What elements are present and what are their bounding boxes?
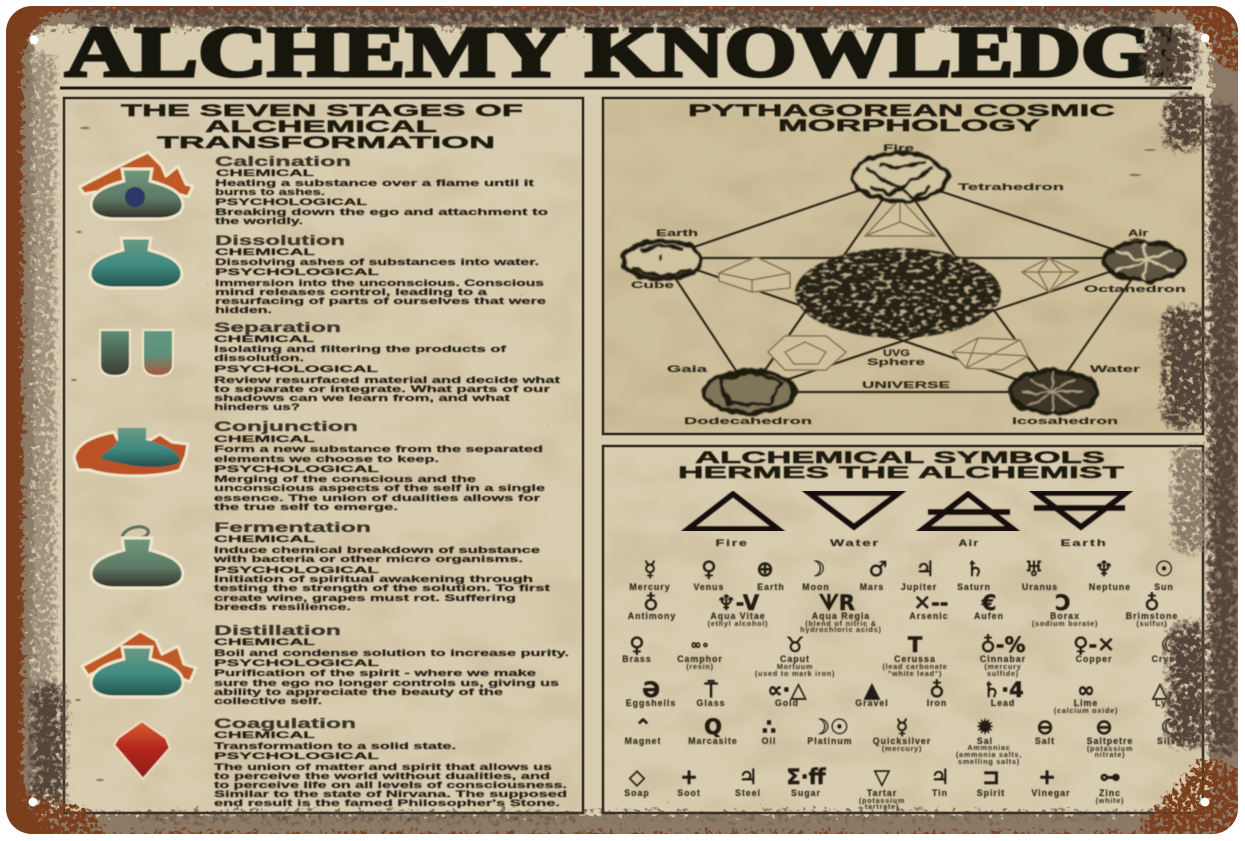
symbol row 5: ✹: [976, 715, 994, 739]
diagram labels: Water: [1090, 364, 1141, 375]
text: fermentation: testing the strength of the solution. To first: [214, 583, 551, 594]
symbol row 4: △: [1152, 678, 1169, 702]
chart: five element pentagram diagram: [623, 143, 1186, 427]
text: dissolution: Dissolving ashes of substances into water.: [215, 257, 539, 268]
symbol row 6: Zinc: [1099, 788, 1121, 798]
text: distillation: [214, 623, 569, 707]
symbol row 5: ☿: [896, 715, 908, 739]
symbol row 4: Gold: [775, 698, 799, 708]
symbol row 5: Ammoniac: [967, 743, 1011, 752]
symbol row 2: (sulfur): [1136, 619, 1168, 628]
text: conjunction: Form a new substance from the separated: [214, 444, 543, 455]
symbol row 6: +: [680, 765, 698, 789]
text: fermentation: Initiation of spiritual awakening through: [214, 574, 533, 585]
text: distillation: PSYCHOLOGICAL: [214, 658, 379, 669]
symbol row 6: Steel: [735, 788, 761, 798]
symbol row 5: Sal: [977, 736, 993, 746]
symbol row 1: planets: ☽: [807, 557, 825, 581]
symbol row 5: ☽☉: [811, 715, 849, 739]
symbol row 2: ♆-V: [717, 591, 760, 615]
symbol row 3: Crystal: [1152, 654, 1188, 664]
text: conjunction: essence. The union of dualities allows for: [214, 493, 541, 504]
symbol row 6: tartrate): [865, 802, 899, 811]
diagram labels: [631, 143, 1186, 427]
text: fermentation: CHEMICAL: [214, 534, 315, 545]
diagram labels: Icosahedron: [1012, 416, 1118, 427]
symbol row 4: Iron: [927, 698, 947, 708]
symbol row 6: +: [1038, 765, 1056, 789]
text: distillation: collective self.: [214, 696, 322, 707]
icon: coagulation red gem: [114, 721, 170, 779]
symbol row 3: ∞∘: [691, 638, 709, 653]
text: distillation: ability to appreciate the beauty of the: [214, 687, 503, 698]
element labels: Fire: [716, 538, 748, 548]
text: coagulation: Transformation to a solid state.: [214, 741, 456, 752]
symbol row 4: ∞: [1077, 678, 1095, 702]
symbol row 3: T: [908, 633, 923, 657]
symbol row 1: planets: ♃: [916, 557, 934, 581]
symbol row 6: ♃: [739, 765, 757, 789]
symbol row 1: planets: Earth: [757, 582, 785, 592]
symbol row 3: Cerussa: [894, 654, 936, 664]
symbol row 5: (mercury): [882, 744, 922, 753]
symbol row 3: ♀-✕: [1073, 633, 1115, 657]
symbol row 4: Ә: [642, 678, 660, 702]
symbol row 6: (white): [1096, 796, 1124, 805]
symbol row 3: [622, 633, 1188, 678]
symbol row 1: planets: Mercury: [629, 582, 671, 592]
text: coagulation: CHEMICAL: [214, 730, 315, 741]
central sphere: [795, 248, 1001, 338]
symbol row 3: ♁-%: [980, 633, 1026, 657]
icon: calcination flask with flames: [79, 152, 193, 219]
symbol row 5: Quicksilver: [873, 736, 931, 746]
text: separation: [214, 320, 561, 413]
symbol row 5: ⊖: [1095, 715, 1113, 739]
symbol row 3: Cinnabar: [980, 654, 1026, 664]
text: distillation: Purification of the spirit - where we make: [214, 668, 536, 679]
symbol row 2: Antimony: [628, 611, 676, 621]
text: separation: Review resurfaced material and decide what: [214, 375, 561, 386]
heading: alchemical symbols: HERMES THE ALCHEMIST: [678, 463, 1125, 482]
symbol row 5: nitrate): [1095, 750, 1125, 759]
symbol row 2: Ɔ: [1055, 591, 1071, 615]
symbol row 4: Eggshells: [626, 698, 676, 708]
text: coagulation: Coagulation: [214, 716, 356, 731]
text: distillation: sure the ego no longer controls us, giving us: [214, 678, 559, 689]
icon: separation test tubes: [100, 330, 173, 376]
text: conjunction: Conjunction: [214, 419, 358, 434]
diagram labels: Gaia: [667, 364, 708, 375]
element labels: Earth: [1060, 538, 1108, 548]
text: fermentation: create wine, grapes must rot. Suffering: [214, 593, 516, 604]
symbol row 5: smelling salts): [958, 757, 1020, 766]
symbol row 4: Glass: [697, 698, 725, 708]
icon: dissolution flask: [90, 238, 182, 288]
text: dissolution: CHEMICAL: [215, 247, 315, 258]
symbol row 6: ▽: [874, 765, 891, 789]
symbol row 1: planets: Sun: [1154, 582, 1174, 592]
diagram labels: Tetrahedron: [958, 182, 1064, 193]
text: calcination: [215, 154, 548, 227]
symbol row 1: planets: ☉: [1155, 557, 1173, 581]
text: distillation: Distillation: [214, 623, 341, 638]
symbol row 6: (potassium: [859, 796, 905, 805]
main title: [63, 26, 1172, 80]
text: fermentation: Fermentation: [214, 520, 371, 535]
panel: seven stages of transformation: [64, 98, 583, 813]
diagram labels: Sphere: [867, 357, 925, 368]
text: fermentation: Induce chemical breakdown of substance: [214, 545, 540, 556]
text: dissolution: Immersion into the unconscious. Conscious: [215, 278, 544, 289]
diagram labels: Cube: [631, 280, 674, 291]
symbol row 6: Tartar: [867, 788, 897, 798]
symbol row 5: Q: [704, 715, 722, 739]
symbol row 5: Platinum: [807, 736, 853, 746]
heading: pythagorean: PYTHAGOREAN COSMIC: [688, 101, 1115, 120]
text: fermentation: [212, 520, 551, 613]
symbol row 1: planets: ♂: [869, 557, 887, 581]
text: separation: Isolating and filtering the products of: [214, 344, 507, 355]
heading: seven stages: THE SEVEN STAGES OF: [121, 101, 523, 120]
symbol row 2: [628, 591, 1178, 634]
symbol row 5: Oil: [762, 736, 776, 746]
symbol row 6: Soot: [677, 788, 701, 798]
symbol row 3: (mercury: [984, 662, 1022, 671]
text: separation: CHEMICAL: [214, 334, 314, 345]
diagram labels: Octahedron: [1084, 284, 1186, 295]
text: coagulation: The union of matter and spirit that allows us: [214, 762, 552, 773]
symbol row 1: planets: ♀: [701, 557, 717, 581]
symbol row 3: Copper: [1076, 654, 1112, 664]
text: separation: hinders us?: [214, 402, 300, 413]
text: conjunction: [214, 419, 545, 513]
symbol row 2: €: [981, 591, 996, 615]
symbol row 4: ▲: [864, 678, 881, 702]
symbol row 3: ☾: [1161, 633, 1179, 657]
text: dissolution: resurfacing of parts of ourselves that were: [215, 296, 546, 307]
symbol row 4: Gravel: [855, 698, 889, 708]
element labels: Air: [958, 538, 980, 548]
element labels: Water: [830, 538, 880, 548]
diagram labels: UVG: [883, 348, 910, 359]
symbol row 2: Arsenic: [909, 611, 949, 621]
symbol row 5: [625, 715, 1187, 766]
symbol row 5: ⊖: [1036, 715, 1054, 739]
symbol row 1: planets: Uranus: [1022, 582, 1058, 592]
diagram labels: UNIVERSE: [862, 380, 950, 391]
symbol row 1: planets: Saturn: [957, 582, 991, 592]
text: coagulation: to perceive life on all levels of consciousness.: [214, 780, 567, 791]
text: separation: dissolution.: [214, 353, 304, 364]
text: dissolution: Dissolution: [215, 233, 345, 248]
diagram labels: Earth: [656, 228, 698, 239]
text: separation: shadows can we learn from, and what: [214, 393, 511, 404]
panel: pythagorean cosmic morphology: [603, 98, 1203, 434]
symbol row 2: hydrochloric acids): [800, 625, 882, 634]
symbol row 4: ⍑: [704, 678, 718, 702]
symbol row 3: Camphor: [677, 654, 723, 664]
title rule: [60, 86, 1192, 90]
text: conjunction: elements we choose to keep.: [214, 454, 439, 465]
icons: four element triangles: [688, 493, 1126, 529]
heading: alchemical symbols: ALCHEMICAL SYMBOLS: [695, 448, 1105, 467]
panel: alchemical symbols: [603, 446, 1203, 813]
symbol row 5: Marcasite: [688, 736, 738, 746]
symbol row 3: ♀: [629, 633, 645, 657]
paper mottling: [66, 100, 1202, 812]
symbol row 1: planets: ♄: [966, 557, 984, 581]
text: conjunction: unconscious aspects of the self in a single: [214, 483, 545, 494]
symbol row 4: Lye: [1155, 698, 1173, 708]
main title: ALCHEMY: [65, 12, 565, 92]
symbol row 5: ∴: [762, 715, 776, 739]
symbol row 2: Aqua Vitae: [710, 611, 766, 621]
node inner detail: [632, 163, 1175, 412]
text: fermentation: PSYCHOLOGICAL: [214, 565, 379, 576]
diagram labels: Air: [1128, 228, 1148, 239]
symbol row 2: Aqua Regia: [812, 611, 870, 621]
text: coagulation: to perceive the world without dualities, and: [214, 771, 550, 782]
symbol row 3: "white lead"): [888, 669, 942, 678]
symbol row 4: Lime: [1074, 698, 1098, 708]
heading: alchemical symbols: [678, 448, 1125, 482]
text: separation: PSYCHOLOGICAL: [214, 364, 378, 375]
symbol row 6: Tin: [932, 788, 948, 798]
element nodes: [623, 153, 1185, 413]
text: separation: to separate or integrate. What parts of our: [214, 384, 551, 395]
symbol row 1: planets: [629, 557, 1174, 592]
symbol row 1: planets: Moon: [802, 582, 830, 592]
symbol row 5: Magnet: [625, 736, 661, 746]
symbol row 6: Soap: [624, 788, 650, 798]
text: calcination: CHEMICAL: [216, 168, 314, 179]
symbol row 6: Spirit: [977, 788, 1005, 798]
symbol row 4: Lead: [991, 698, 1015, 708]
symbol row 6: ⊶: [1100, 765, 1120, 789]
text: calcination: Breaking down the ego and attachment to: [215, 207, 548, 218]
symbol row 1: planets: ♆: [1095, 557, 1113, 581]
small solids: [719, 199, 1078, 370]
text: distillation: CHEMICAL: [214, 637, 315, 648]
icon: conjunction flask with flames: [74, 428, 188, 476]
text: separation: Separation: [214, 320, 341, 335]
parchment flecks: [71, 127, 1156, 781]
symbol row 4: ∝·△: [767, 678, 807, 702]
symbol row 5: ⌃: [634, 715, 652, 739]
text: fermentation: with bacteria or other micro organisms.: [212, 554, 523, 565]
text: calcination: Calcination: [215, 154, 351, 169]
heading: pythagorean: MORPHOLOGY: [778, 116, 1041, 135]
symbol row 4: [626, 678, 1173, 715]
symbol row 2: ✕--: [913, 591, 949, 615]
text: conjunction: CHEMICAL: [214, 434, 315, 445]
symbol row 2: (blend of nitric &: [805, 619, 877, 628]
diagram labels: Dodecahedron: [684, 416, 812, 427]
symbol row 1: planets: Mars: [860, 582, 884, 592]
symbol row 1: planets: Neptune: [1089, 582, 1131, 592]
symbol row 2: (ethyl alcohol): [708, 619, 768, 628]
symbol row 4: ♄·4: [982, 678, 1024, 702]
text: calcination: the worldly.: [215, 216, 303, 227]
text: coagulation: [214, 716, 567, 809]
symbol row 5: ☾: [1161, 715, 1179, 739]
symbol row 1: planets: Jupiter: [901, 582, 937, 592]
symbol row 6: Σ·ff: [786, 765, 827, 789]
symbol row 5: Saltpetre: [1087, 736, 1133, 746]
symbol row 2: Aufen: [974, 611, 1004, 621]
symbol row 1: planets: Venus: [694, 582, 724, 592]
element labels: [716, 538, 1108, 548]
symbol row 6: ⊐: [982, 765, 1000, 789]
heading: seven stages: TRANSFORMATION: [157, 133, 495, 152]
text: dissolution: [215, 233, 546, 316]
symbol row 5: Silver: [1157, 736, 1187, 746]
heading: seven stages: ALCHEMICAL: [205, 117, 437, 136]
text: coagulation: Similar to the state of Nirvana. The supposed: [214, 789, 567, 800]
text: distillation: Boil and condense solution to increase purity.: [214, 648, 569, 659]
symbol row 4: (calcium oxide): [1054, 706, 1118, 715]
main title: KNOWLEDGE: [585, 12, 1215, 92]
symbol row 3: Caput: [780, 654, 810, 664]
symbol row 2: (sodium borate): [1032, 619, 1098, 628]
symbol row 3: sulfide): [987, 669, 1019, 678]
text: calcination: PSYCHOLOGICAL: [215, 197, 367, 208]
text: dissolution: PSYCHOLOGICAL: [215, 267, 379, 278]
text: calcination: burns to ashes.: [215, 187, 325, 198]
text: dissolution: mind releases control, leading to a: [215, 287, 488, 298]
text: calcination: Heating a substance over a flame until it: [215, 178, 535, 189]
symbol row 3: (used to mark iron): [755, 669, 835, 678]
symbol row 6: ◇: [629, 765, 646, 789]
symbol row 5: (potassium: [1087, 744, 1133, 753]
heading: seven stages: [121, 101, 523, 152]
symbol row 3: Brass: [622, 654, 652, 664]
symbol row 6: [624, 765, 1124, 811]
text: conjunction: the true self to emerge.: [214, 502, 398, 513]
symbol row 5: (ammonia salts,: [956, 750, 1022, 759]
text: fermentation: breeds resilience.: [214, 602, 351, 613]
symbol row 6: Vinegar: [1031, 788, 1071, 798]
icon: distillation flask with flames: [82, 631, 196, 697]
symbol row 3: ♉: [786, 633, 804, 657]
symbol row 1: planets: ☿: [644, 557, 656, 581]
symbol row 2: Brimstone: [1126, 611, 1178, 621]
symbol row 2: ᗐR: [819, 591, 855, 615]
symbol row 6: Sugar: [791, 788, 821, 798]
text: conjunction: PSYCHOLOGICAL: [214, 464, 379, 475]
symbol row 6: ♃: [931, 765, 949, 789]
text: coagulation: PSYCHOLOGICAL: [214, 751, 379, 762]
diagram labels: Fire: [883, 143, 914, 154]
symbol row 2: Borax: [1050, 611, 1080, 621]
symbol row 1: planets: ♅: [1025, 557, 1043, 581]
heading: pythagorean: [688, 101, 1115, 135]
symbol row 4: ♁: [929, 678, 945, 702]
symbol row 2: ♁: [1144, 591, 1160, 615]
symbol row 3: (lead carbonate: [882, 662, 948, 671]
symbol row 3: (resin): [686, 662, 714, 671]
symbol row 5: Salt: [1035, 736, 1055, 746]
symbol row 3: Mortuum: [777, 662, 813, 671]
symbol row 2: ♁: [643, 591, 659, 615]
text: coagulation: end result is the famed Philosopher's Stone.: [214, 798, 560, 809]
text: dissolution: hidden.: [215, 305, 272, 316]
icon: fermentation flask: [91, 527, 183, 588]
text: conjunction: Merging of the conscious and the: [214, 474, 476, 485]
symbol row 1: planets: ⊕: [756, 557, 774, 581]
